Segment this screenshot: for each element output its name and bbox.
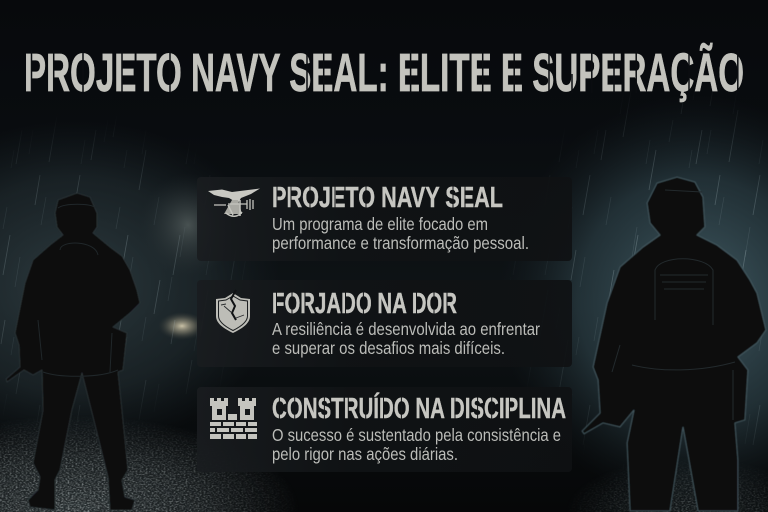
description: Um programa de elite focado em (272, 214, 488, 234)
description (272, 319, 540, 358)
description: performance e transformação pessoal. (272, 233, 529, 253)
heading: CONSTRUÍDO NA DISCIPLINA (272, 391, 566, 425)
description (272, 214, 529, 253)
description: pelo rigor nas ações diárias. (272, 444, 458, 464)
rain streaks (0, 96, 763, 475)
heading: PROJETO NAVY SEAL (272, 182, 503, 214)
icon: fortress wall (210, 398, 257, 439)
icon: trident eagle (208, 188, 260, 216)
soldier left silhouette (6, 193, 140, 510)
heading: FORJADO NA DOR (272, 288, 457, 320)
panel: Forjado na Dor (197, 280, 572, 367)
description: A resiliência é desenvolvida ao enfrentar (272, 319, 540, 339)
description: O sucesso é sustentado pela consistência e (272, 425, 561, 445)
background: rainy night scene (0, 126, 768, 512)
description: e superar os desafios mais difíceis. (272, 338, 505, 358)
panel: Construído na Disciplina (197, 387, 572, 472)
heading (272, 391, 566, 425)
icon: cracked shield (216, 290, 250, 333)
panel: Projeto Navy Seal (197, 177, 572, 261)
soldier right silhouette (582, 177, 766, 511)
description (272, 425, 561, 464)
